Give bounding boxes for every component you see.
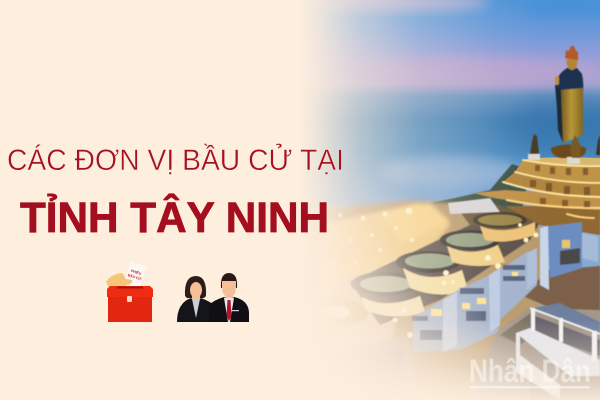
head and crown <box>566 54 578 70</box>
robe <box>560 88 583 143</box>
title line 1: CÁC ĐƠN VỊ BẦU CỬ TẠI <box>7 143 344 177</box>
tier light strips <box>503 160 600 218</box>
temple tiers below statue <box>448 157 600 235</box>
hillside <box>428 164 527 212</box>
man <box>209 273 249 322</box>
title line 2: TỈNH TÂY NINH <box>20 193 329 242</box>
box <box>108 296 152 322</box>
low block <box>396 340 409 351</box>
lit walls under the plates <box>403 268 468 295</box>
statue: Bodhisattva <box>551 46 586 164</box>
fountain terraces <box>348 203 539 325</box>
lower stairs and pale pavilion <box>486 302 600 398</box>
sky and sea <box>300 0 600 400</box>
ballot paper: PHIẾU <box>130 268 142 276</box>
body upper <box>554 67 584 106</box>
cream fade overlays <box>300 0 600 400</box>
ballot paper <box>122 261 147 293</box>
windows <box>412 265 525 340</box>
lotus base <box>551 144 586 158</box>
rock slope <box>523 266 600 312</box>
icon: ballot box <box>106 261 153 322</box>
blue side buildings <box>412 222 600 352</box>
star lights <box>333 208 538 338</box>
ballot paper: BẦU CỬ <box>127 272 142 281</box>
front lotus figure <box>570 135 581 158</box>
photo: Ba Den mountain statue and temple <box>298 0 600 400</box>
central blocks <box>413 250 537 352</box>
hand <box>106 273 132 290</box>
woman <box>177 276 214 322</box>
lit terraces base <box>318 198 544 392</box>
raised hand <box>555 76 559 85</box>
icon: two delegates <box>177 273 249 322</box>
small guardian statues <box>528 134 600 160</box>
